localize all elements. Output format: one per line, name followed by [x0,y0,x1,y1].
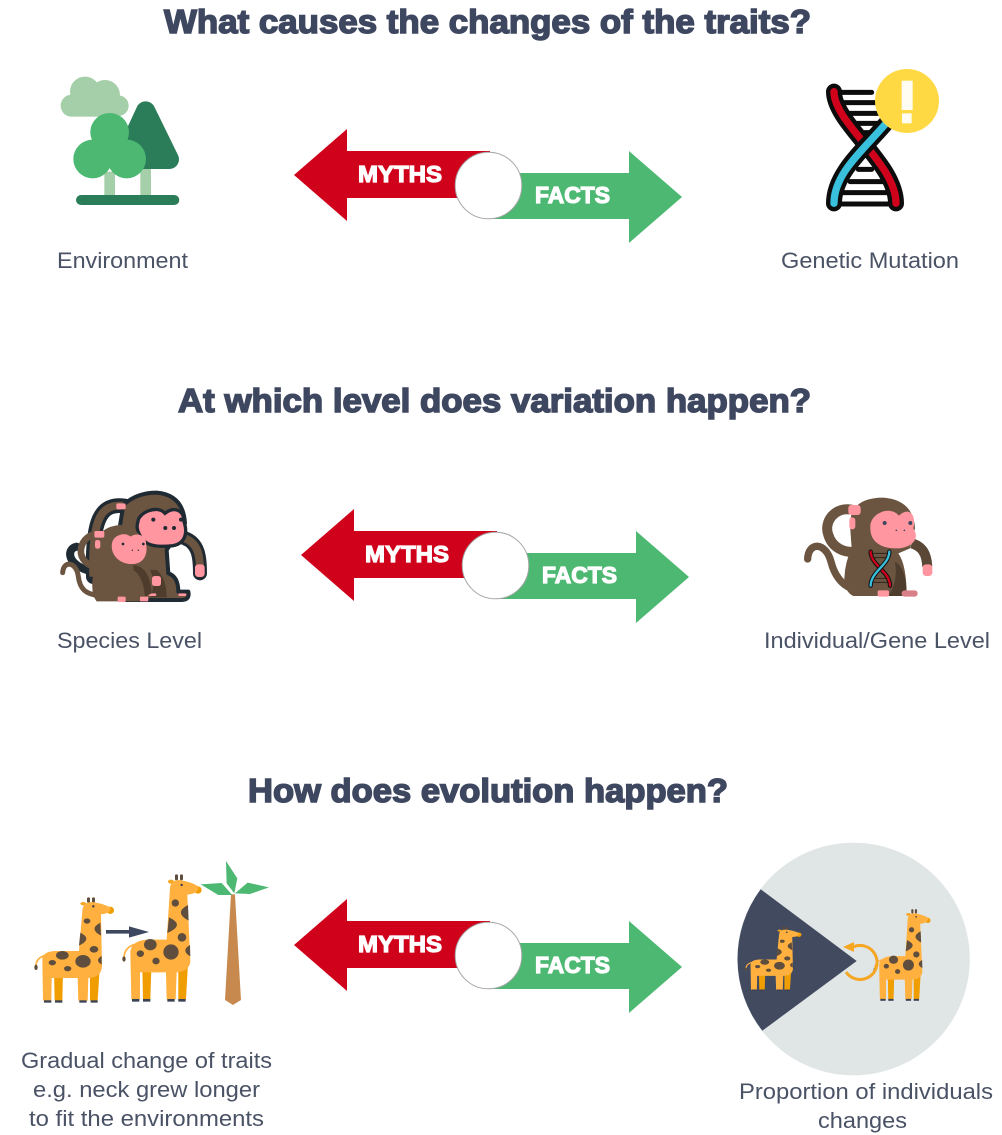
icon: monkey family at species level [63,493,205,602]
title: traits: What causes the changes of the traits? [164,3,811,40]
giraffe: long neck [873,909,930,1001]
label: gradual change of traits: e.g. neck grew longer [33,1077,260,1102]
label: proportion of individuals changes [739,1079,993,1133]
arrows: myths and facts 1: FACTS [535,182,610,208]
arrows: myths and facts 2 [301,509,689,623]
pie chart: proportion of giraffes [737,843,970,1075]
arrows: myths and facts 3: MYTHS [358,931,442,957]
label: individual gene level: Individual/Gene Level [764,628,990,653]
title: how evolution happens: How does evolution happen? [248,772,728,809]
icon: orange cycle arrow [843,942,877,979]
label: species level: Species Level [57,628,202,653]
label: gradual change of traits: to fit the environments [29,1106,264,1131]
icon: DNA with warning [834,69,939,204]
arrows: myths and facts 1: MYTHS [358,161,442,187]
arrows: myths and facts 1 [294,129,682,243]
label: gradual change of traits: Gradual change of traits [21,1048,272,1073]
arrows: myths and facts 2: MYTHS [365,541,449,567]
label: proportion of individuals changes: Proportion of individuals [739,1079,993,1104]
icon: monkey with DNA [808,498,932,597]
label: genetic mutation: Genetic Mutation [781,248,959,273]
label: gradual change of traits [21,1048,272,1131]
icon: environment trees and cloud [61,77,179,205]
title: variation level: At which level does variation happen? [178,382,811,419]
giraffe: short neck [745,927,801,991]
label: environment: Environment [57,248,188,273]
arrows: myths and facts 2: FACTS [542,562,617,588]
arrows: myths and facts 3 [294,899,682,1013]
illustration: giraffes and palm tree [34,861,269,1005]
arrows: myths and facts 3: FACTS [535,952,610,978]
label: proportion of individuals changes: changes [818,1108,907,1133]
